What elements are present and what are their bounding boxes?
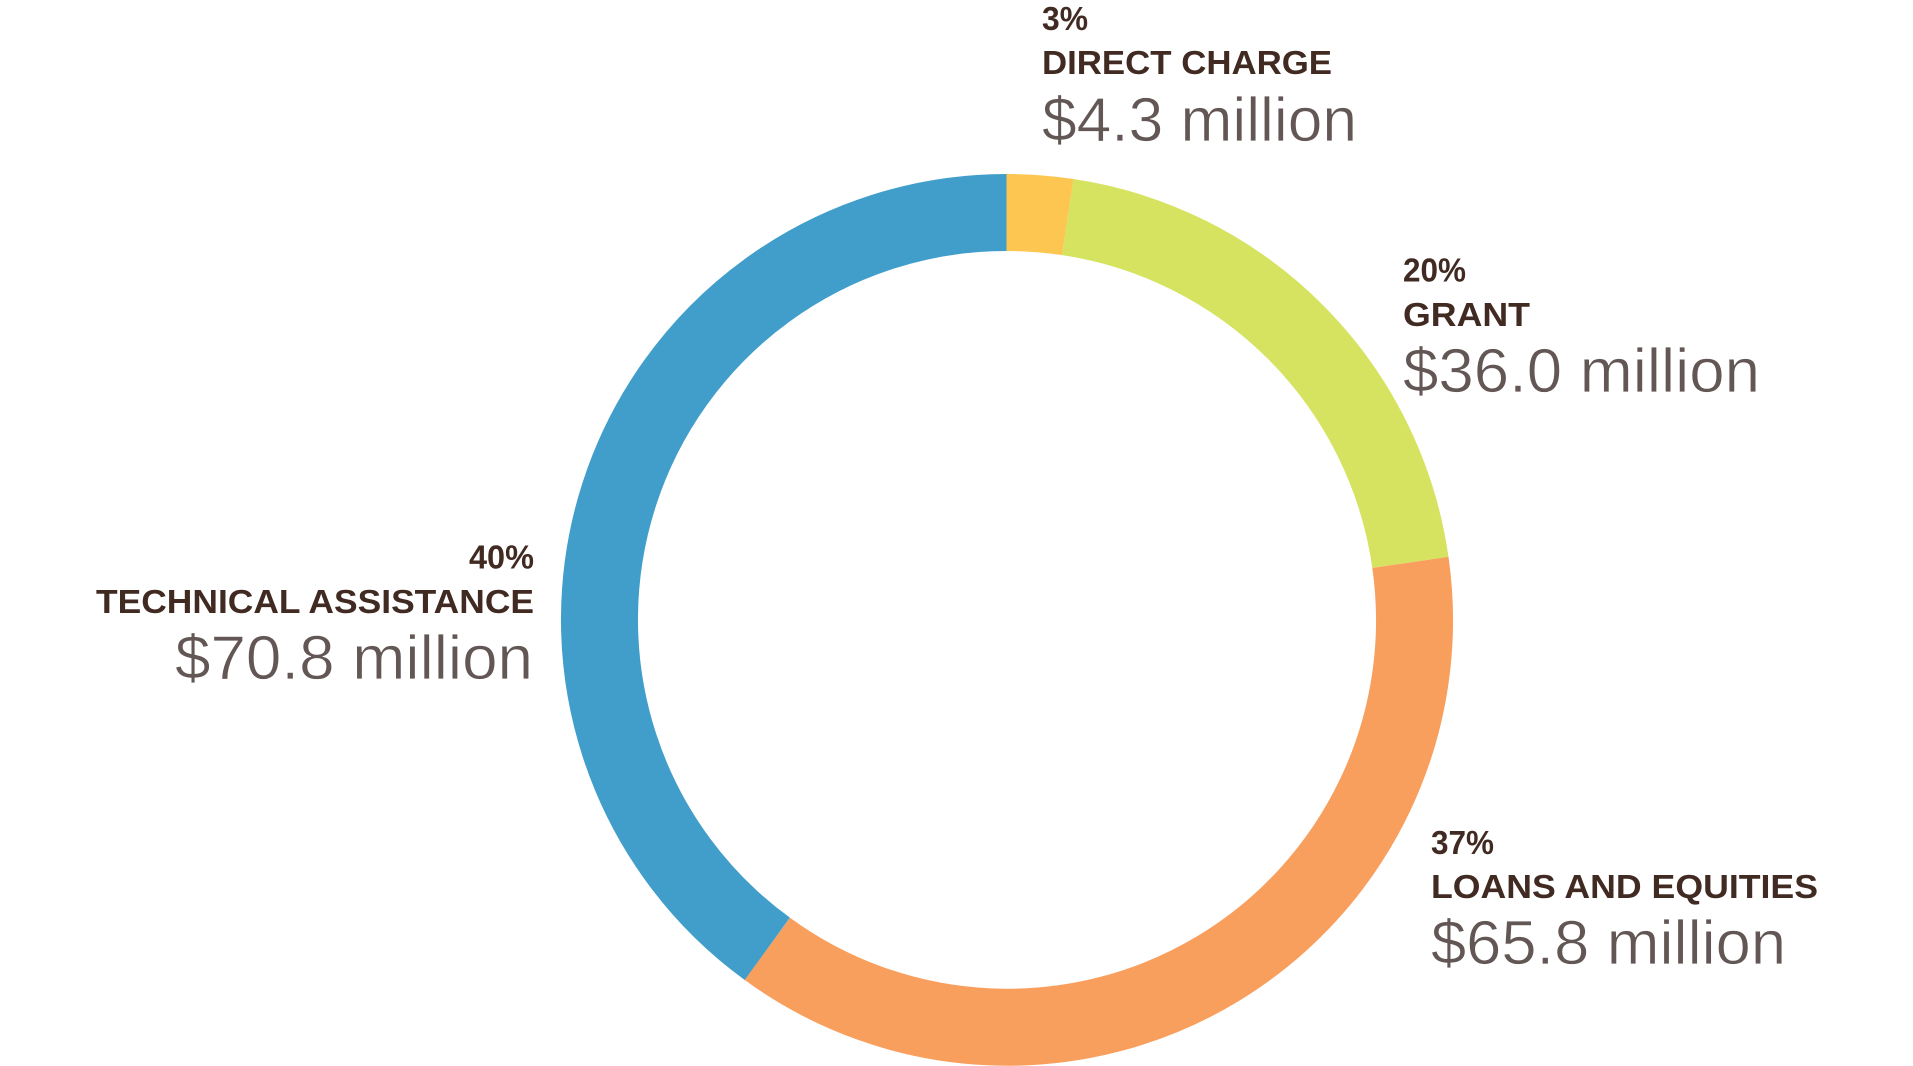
label: technical assistance [96,538,534,693]
segment: direct charge 3% [1006,212,1068,217]
label: grant: $36.0 million [1403,337,1760,406]
label: loans and equities [1431,824,1818,978]
label: technical assistance: 40% [469,538,534,576]
label: direct charge: 3% [1042,0,1088,37]
label: grant [1403,252,1760,406]
label: direct charge [1042,0,1357,155]
label: direct charge: DIRECT CHARGE [1042,44,1332,81]
label: grant: 20% [1403,252,1466,288]
label: loans and equities: 37% [1431,824,1494,861]
label: loans and equities: $65.8 million [1431,909,1786,978]
donut ring [599,212,1415,1027]
label: technical assistance: TECHNICAL ASSISTANCE [96,583,534,620]
label: grant: GRANT [1403,296,1530,333]
label: technical assistance: $70.8 million [175,624,533,693]
segment: grant 20% [1068,217,1410,562]
label: loans and equities: LOANS AND EQUITIES [1431,868,1818,905]
segment: loans and equities 37% [767,562,1415,1027]
segment: technical assistance 40% [599,212,1006,949]
label: direct charge: $4.3 million [1042,86,1357,155]
